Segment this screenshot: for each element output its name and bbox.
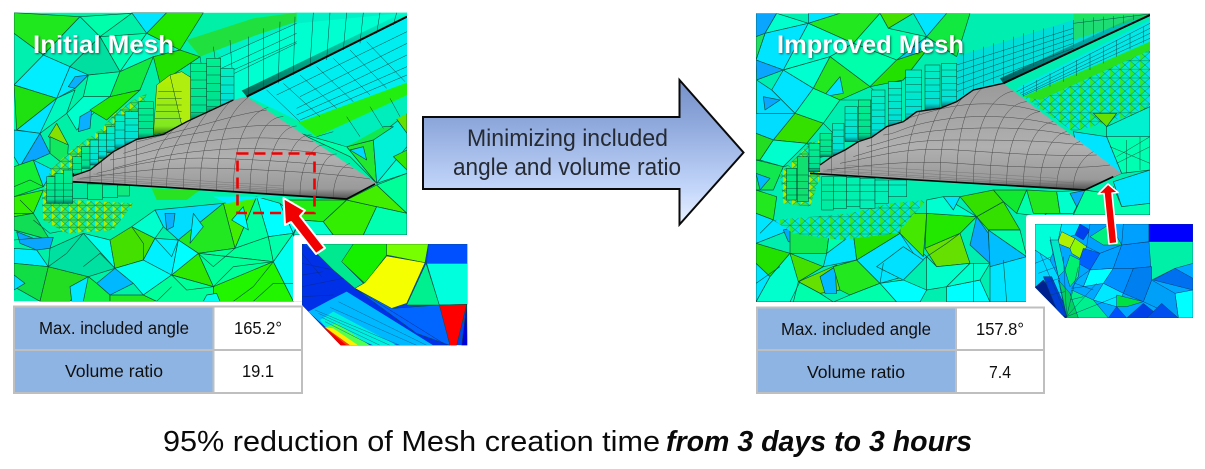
table: initial mesh metrics [14, 306, 302, 393]
table label: max included angle: Max. included angle [781, 319, 931, 339]
table label: max included angle: Max. included angle [39, 318, 189, 338]
prism columns below wing [73, 183, 129, 199]
table: improved mesh metrics [757, 308, 1044, 393]
callout: red dashed zoom box [238, 154, 314, 213]
inset: improved mesh close-up [1026, 215, 1193, 319]
arrow text line 1: Minimizing included [467, 125, 668, 152]
bottom summary text [163, 426, 972, 458]
panel: improved mesh image [756, 9, 1150, 302]
arrow text line 2: angle and volume ratio [453, 154, 681, 181]
emphasis: from 3 days to 3 hours: from 3 days to 3 hours [666, 426, 972, 458]
table label: volume ratio: Volume ratio [65, 361, 163, 381]
prism columns above wing [47, 58, 234, 203]
inset: initial mesh close-up [293, 235, 468, 346]
table value: 19.1: 19.1 [242, 361, 274, 381]
heading: Initial Mesh: Initial Mesh [33, 31, 174, 59]
table value: 157.8: 157.8° [976, 319, 1024, 339]
arrow: red pointer to wing (initial) [284, 198, 325, 254]
top right structured mesh [216, 12, 407, 56]
wing surface [73, 97, 377, 199]
fine mesh patches [42, 93, 147, 233]
bottom summary text: 95% reduction of Mesh creation time [163, 426, 660, 458]
table label: volume ratio: Volume ratio [807, 362, 905, 382]
arrow: minimizing included angle and volume ratio [423, 80, 744, 224]
panel: initial mesh image [14, 11, 407, 301]
table value: 7.4: 7.4 [989, 362, 1011, 382]
improved wing surface [820, 83, 1122, 190]
table value: 165.2: 165.2° [234, 318, 282, 338]
heading: Improved Mesh: Improved Mesh [777, 31, 964, 59]
arrow: red pointer to tip (improved) [1098, 184, 1118, 244]
wing black edges [247, 17, 407, 97]
